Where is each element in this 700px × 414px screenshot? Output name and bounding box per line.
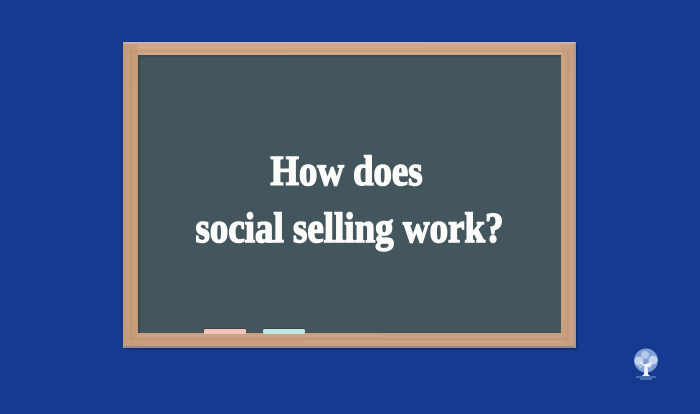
heading [195, 149, 503, 252]
icon: tree logo [634, 348, 658, 380]
heading line 1: How does [270, 149, 423, 195]
chalk: mint [263, 329, 305, 334]
chalk: pink [204, 329, 246, 334]
heading line 2: social selling work? [195, 206, 503, 252]
chalkboard [123, 42, 578, 350]
panel: slate board [138, 55, 561, 333]
panel: wooden frame [123, 42, 578, 350]
